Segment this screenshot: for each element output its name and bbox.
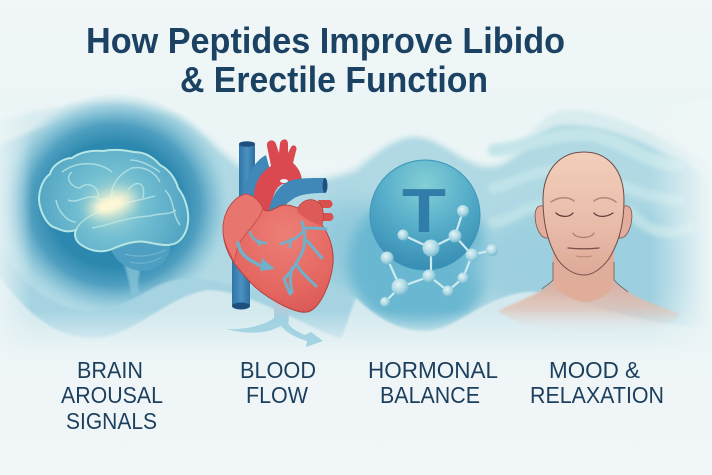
label: mood and relaxation: MOOD & (549, 357, 640, 383)
pulmonary artery (269, 178, 328, 214)
head (543, 152, 624, 275)
label: hormonal balance (368, 357, 498, 408)
right atrium (223, 194, 263, 262)
label: blood flow (240, 357, 316, 408)
vena cava (232, 141, 270, 310)
title: How Peptides Improve Libido (86, 20, 565, 61)
label: brain arousal signals: SIGNALS (66, 408, 157, 434)
brain stem and cerebellum (111, 240, 170, 295)
brain hemisphere (39, 150, 188, 251)
hormone sphere (370, 160, 480, 270)
pulmonary veins (318, 200, 334, 221)
label: brain arousal signals: BRAIN (77, 357, 143, 383)
icon: brain (39, 150, 188, 295)
shoulders (498, 282, 680, 335)
label: blood flow: FLOW (246, 382, 308, 408)
icon: relaxed person (498, 152, 680, 335)
left atrium (297, 201, 323, 226)
aorta (254, 139, 302, 214)
background waves (0, 93, 712, 376)
label: hormonal balance: HORMONAL (368, 357, 498, 383)
title (86, 20, 565, 100)
neck (553, 250, 614, 302)
label: mood and relaxation: RELAXATION (530, 382, 664, 408)
brain folds (56, 160, 180, 230)
label: brain arousal signals (61, 357, 163, 434)
icon: heart (223, 139, 334, 347)
molecule bonds (385, 211, 492, 302)
molecule nodes (380, 205, 498, 307)
blood flow arrow (226, 298, 323, 347)
ears (535, 206, 632, 238)
label: hormonal balance: BALANCE (380, 382, 480, 408)
label: mood and relaxation (530, 357, 664, 408)
letter T: T (402, 177, 446, 246)
label: blood flow: BLOOD (240, 357, 316, 383)
face (551, 198, 616, 257)
coronary vessels (238, 222, 326, 294)
icon: testosterone molecule (370, 160, 498, 307)
label: brain arousal signals: AROUSAL (61, 382, 163, 408)
heart body (223, 194, 333, 312)
coronary arrow head (260, 258, 275, 271)
title: & Erectile Function (180, 59, 488, 100)
